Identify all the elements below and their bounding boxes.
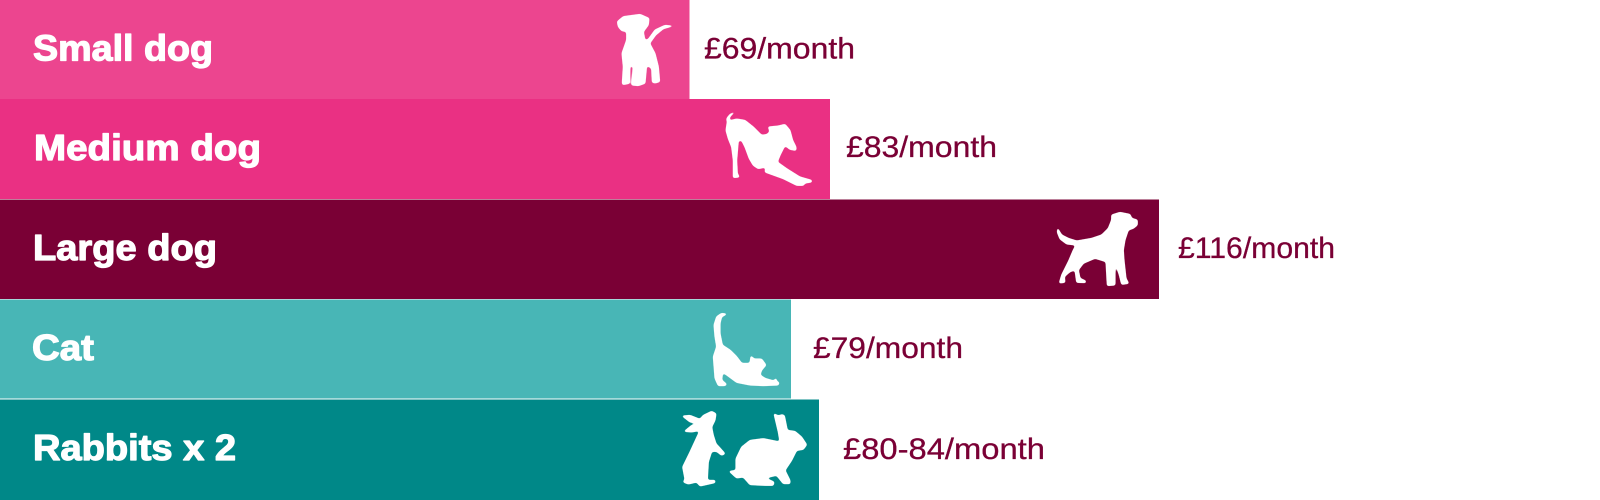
row: large dog	[0, 200, 1335, 299]
value: small dog: £69/month	[704, 32, 855, 66]
row: cat	[0, 300, 963, 398]
bar: large dog	[0, 200, 1159, 299]
label: cat: Cat	[32, 327, 94, 368]
icon: crouching rabbit silhouette	[729, 414, 807, 485]
icon: medium dog silhouette	[726, 112, 812, 185]
icon: small dog silhouette	[617, 14, 673, 86]
bar: small dog	[0, 0, 690, 99]
icon: cat silhouette	[713, 313, 779, 386]
value: medium dog: £83/month	[846, 131, 997, 164]
label: small dog: Small dog	[33, 28, 213, 68]
value: large dog: £116/month	[1178, 232, 1335, 265]
icon: large dog silhouette	[1057, 212, 1137, 286]
bar: rabbits	[0, 400, 819, 500]
value: rabbits: £80-84/month	[843, 433, 1045, 466]
label: medium dog: Medium dog	[34, 127, 261, 168]
label: large dog: Large dog	[33, 227, 217, 268]
row: rabbits	[0, 400, 1045, 500]
icon: upright rabbit silhouette	[682, 411, 725, 486]
label: rabbits: Rabbits x 2	[33, 427, 236, 468]
row: medium dog	[0, 99, 997, 199]
row: small dog	[0, 0, 855, 99]
bar: cat	[0, 300, 791, 398]
bar: medium dog	[0, 99, 830, 199]
value: cat: £79/month	[813, 332, 963, 365]
